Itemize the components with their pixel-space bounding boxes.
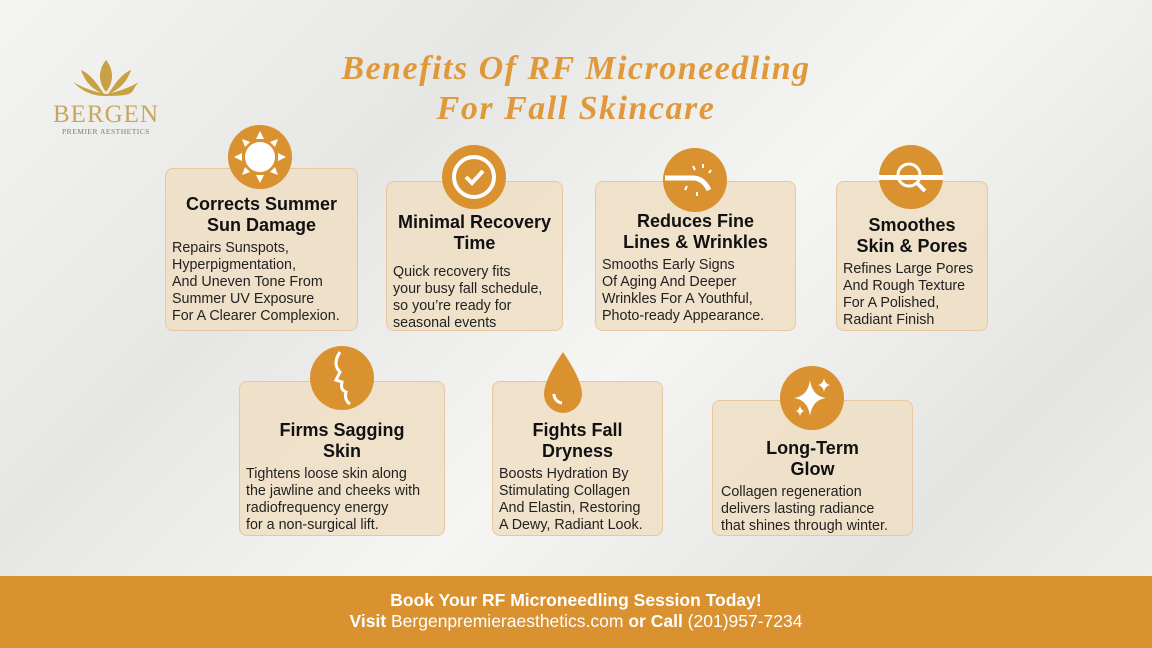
- card: firms: Skin: [323, 441, 361, 461]
- card: firms: Firms Sagging: [279, 420, 404, 440]
- card: firms: radiofrequency energy: [246, 500, 388, 516]
- logo: [53, 60, 159, 136]
- card: firms: the jawline and cheeks with: [246, 483, 420, 499]
- card: sun damage: Repairs Sunspots,: [172, 240, 289, 256]
- card: wrinkles: Photo-ready Appearance.: [602, 308, 764, 324]
- card: firms: [239, 381, 445, 536]
- card: dryness: Boosts Hydration By: [499, 466, 629, 482]
- card: dryness: A Dewy, Radiant Look.: [499, 517, 643, 533]
- footer: [0, 576, 1152, 648]
- card: dryness: Fights Fall: [532, 420, 622, 440]
- card: glow: delivers lasting radiance: [721, 501, 874, 517]
- card: sun damage: [165, 168, 358, 331]
- icon: drop: [544, 352, 582, 413]
- icon: magnifier: [879, 145, 943, 209]
- card: recovery: your busy fall schedule,: [393, 281, 542, 297]
- card: dryness: Dryness: [542, 441, 613, 461]
- card: recovery: [386, 181, 563, 331]
- icon: sparkle: [780, 366, 844, 430]
- footer: Book Your RF Microneedling Session Today!: [390, 590, 762, 610]
- card: recovery: Time: [454, 233, 495, 253]
- card: pores: Smoothes: [868, 215, 956, 235]
- card: wrinkles: Of Aging And Deeper: [602, 274, 736, 290]
- logo: PREMIER AESTHETICS: [62, 127, 150, 136]
- title: For Fall Skincare: [437, 90, 715, 127]
- card: sun damage: Corrects Summer: [186, 194, 337, 214]
- card: firms: for a non-surgical lift.: [246, 517, 379, 533]
- card: wrinkles: Wrinkles For A Youthful,: [602, 291, 753, 307]
- logo: BERGEN: [53, 101, 159, 128]
- card: pores: Refines Large Pores: [843, 261, 973, 277]
- card: pores: For A Polished,: [843, 295, 939, 311]
- card: sun damage: For A Clearer Complexion.: [172, 308, 340, 324]
- title: [341, 50, 811, 127]
- card: glow: [712, 400, 913, 536]
- card: pores: Skin & Pores: [856, 236, 968, 256]
- title: Benefits Of RF Microneedling: [341, 50, 811, 87]
- card: wrinkles: Reduces Fine: [637, 211, 754, 231]
- card: glow: Collagen regeneration: [721, 484, 862, 500]
- card: dryness: [492, 381, 663, 536]
- card: recovery: Minimal Recovery: [398, 212, 551, 232]
- card: wrinkles: Lines & Wrinkles: [623, 232, 768, 252]
- card: dryness: And Elastin, Restoring: [499, 500, 640, 516]
- icon: sun: [228, 125, 292, 189]
- card: dryness: Stimulating Collagen: [499, 483, 630, 499]
- icon: face: [310, 346, 374, 410]
- card: sun damage: Summer UV Exposure: [172, 291, 314, 307]
- card: pores: Radiant Finish: [843, 312, 934, 328]
- card: glow: Glow: [790, 459, 834, 479]
- card: wrinkles: Smooths Early Signs: [602, 257, 735, 273]
- footer: Visit Bergenpremieraesthetics.com or Call (201)957-7234: [350, 611, 802, 631]
- card: recovery: seasonal events: [393, 315, 496, 331]
- card: recovery: Quick recovery fits: [393, 264, 511, 280]
- card: pores: And Rough Texture: [843, 278, 965, 294]
- card: wrinkles: [595, 181, 796, 331]
- card: glow: Long-Term: [766, 438, 859, 458]
- card: sun damage: And Uneven Tone From: [172, 274, 323, 290]
- icon: clock: [442, 145, 506, 209]
- card: firms: Tightens loose skin along: [246, 466, 407, 482]
- card: sun damage: Sun Damage: [207, 215, 316, 235]
- card: pores: [836, 181, 988, 331]
- card: recovery: so you’re ready for: [393, 298, 511, 314]
- icon: wrinkle: [663, 148, 727, 212]
- card: glow: that shines through winter.: [721, 518, 888, 534]
- card: sun damage: Hyperpigmentation,: [172, 257, 296, 273]
